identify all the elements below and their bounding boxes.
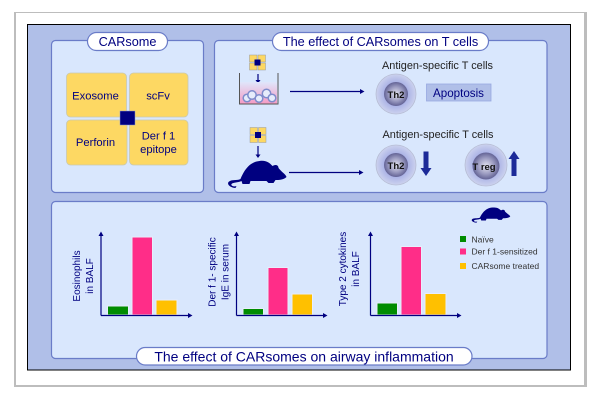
axes — [98, 232, 192, 318]
bars — [243, 268, 312, 315]
cell: T reg: T reg — [472, 162, 496, 173]
icon: legend mouse — [472, 207, 510, 223]
cell: T reg — [465, 144, 507, 186]
chart: eosinophils — [72, 232, 192, 318]
arrow: well to Th2 — [290, 89, 364, 94]
heading: CARsome: CARsome — [99, 35, 156, 49]
icon: CARsome small bottom — [250, 128, 266, 142]
panel: effect on airway inflammation — [52, 202, 547, 365]
label: Apoptosis — [426, 84, 491, 101]
label: Antigen-specific T cells bottom: Antigen-specific T cells — [382, 129, 494, 141]
tile: Der f 1 epitope: epitope — [140, 144, 177, 156]
icon: culture well — [240, 73, 278, 104]
cell: Th2 bottom: Th2 — [388, 161, 404, 172]
tile: scFv — [130, 73, 188, 117]
icon: mouse — [228, 161, 286, 188]
axes — [368, 232, 462, 318]
legend: Der f 1-sensitized — [472, 246, 538, 256]
icon: CARsome small top — [250, 55, 266, 70]
legend: Naïve — [472, 234, 494, 244]
chart: type 2 cytokines — [338, 232, 462, 318]
tile: Perforin: Perforin — [76, 137, 115, 149]
cell: Th2 top — [376, 74, 416, 114]
arrow: up — [508, 151, 520, 176]
cell: Th2 bottom — [376, 145, 416, 185]
heading: effect on T cells: The effect of CARsomes on T cells — [283, 35, 478, 49]
label: Antigen-specific T cells top: Antigen-specific T cells — [382, 60, 494, 72]
tile: Exosome — [66, 73, 126, 117]
tile: Exosome: Exosome — [72, 90, 119, 102]
axis label: Type 2 cytokines in BALF: Type 2 cytokines — [338, 232, 349, 306]
arrow: down — [420, 152, 432, 176]
tile: Perforin — [66, 120, 127, 165]
centre square — [120, 111, 135, 125]
panel: effect on T cells — [214, 32, 547, 192]
cell: Th2 top: Th2 — [388, 90, 404, 101]
axis label: Eosinophils in BALF: Eosinophils — [72, 250, 83, 302]
heading: effect on airway inflammation: The effect of CARsomes on airway inflammation — [154, 348, 454, 364]
axis label: Type 2 cytokines in BALF: in BALF — [351, 251, 362, 287]
legend — [460, 234, 539, 271]
arrow: mouse to Th2 — [289, 170, 364, 175]
axis label: Der f 1-specific IgE in serum: Der f 1- specific — [208, 237, 218, 307]
axis label: Eosinophils in BALF: in BALF — [85, 258, 96, 294]
tile: Der f 1 epitope — [130, 120, 188, 165]
legend: CARsome treated — [472, 261, 539, 271]
bars — [377, 246, 446, 315]
tile: scFv: scFv — [146, 90, 170, 102]
axis label: Der f 1-specific IgE in serum: IgE in serum — [220, 244, 232, 300]
label: Apoptosis: Apoptosis — [433, 87, 484, 100]
chart: IgE — [208, 232, 328, 318]
bars — [108, 237, 177, 315]
arrow: into well — [256, 74, 260, 84]
panel: CARsome — [52, 32, 204, 192]
axes — [234, 232, 328, 318]
heading: CARsome — [88, 32, 168, 50]
arrow: into mouse — [256, 146, 260, 158]
tile: Der f 1 epitope: Der f 1 — [142, 130, 175, 142]
